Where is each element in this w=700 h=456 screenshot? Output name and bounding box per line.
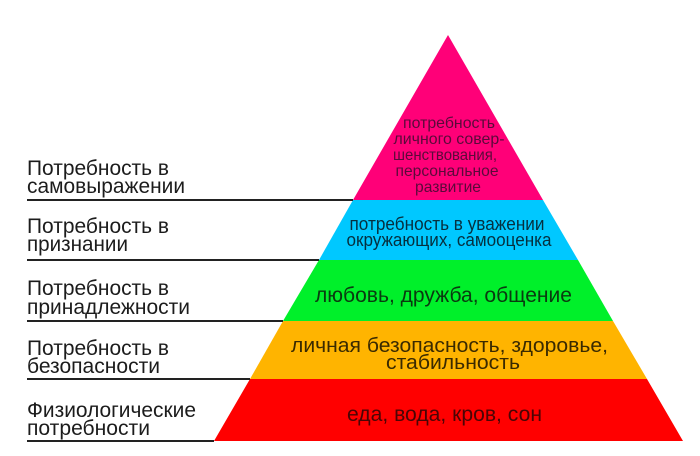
level 5: self-actualization: личного совер- — [394, 131, 504, 148]
label: self-expression: самовыражении — [27, 174, 185, 198]
label: belonging: Потребность в — [27, 276, 169, 300]
level 4: esteem — [319, 200, 578, 260]
level 5: self-actualization: развитие — [415, 179, 481, 196]
label: belonging — [27, 276, 283, 322]
level 4: esteem: окружающих, самооценка — [346, 230, 552, 250]
label: self-expression: Потребность в — [27, 156, 169, 180]
label: recognition: Потребность в — [27, 214, 169, 238]
label: recognition: признании — [27, 232, 128, 256]
label: belonging: принадлежности — [27, 295, 190, 319]
level 5: self-actualization: потребность — [403, 115, 495, 132]
label: physiological: Физиологические — [27, 398, 196, 422]
level 2: safety: личная безопасность, здоровье, — [291, 334, 608, 357]
label: safety — [27, 336, 250, 380]
level 1: physiological — [214, 379, 683, 441]
level 2: safety — [250, 321, 647, 379]
label: safety: безопасности — [27, 354, 160, 378]
label: safety: Потребность в — [27, 336, 169, 360]
level 3: belonging — [283, 260, 613, 321]
level 2: safety: стабильность — [386, 351, 520, 374]
pyramid — [214, 35, 683, 441]
level 5: self-actualization: шенствования, — [393, 147, 497, 164]
label: recognition — [27, 214, 319, 261]
level 4: esteem: потребность в уважении — [350, 214, 544, 234]
label: self-expression — [27, 156, 353, 201]
label: physiological: потребности — [27, 416, 150, 440]
level 3: belonging: любовь, дружба, общение — [315, 284, 572, 307]
level 1: physiological: еда, вода, кров, сон — [347, 403, 542, 426]
level 5: self-actualization — [353, 35, 543, 200]
label: physiological — [27, 398, 214, 442]
level 5: self-actualization: персональное — [396, 163, 499, 180]
